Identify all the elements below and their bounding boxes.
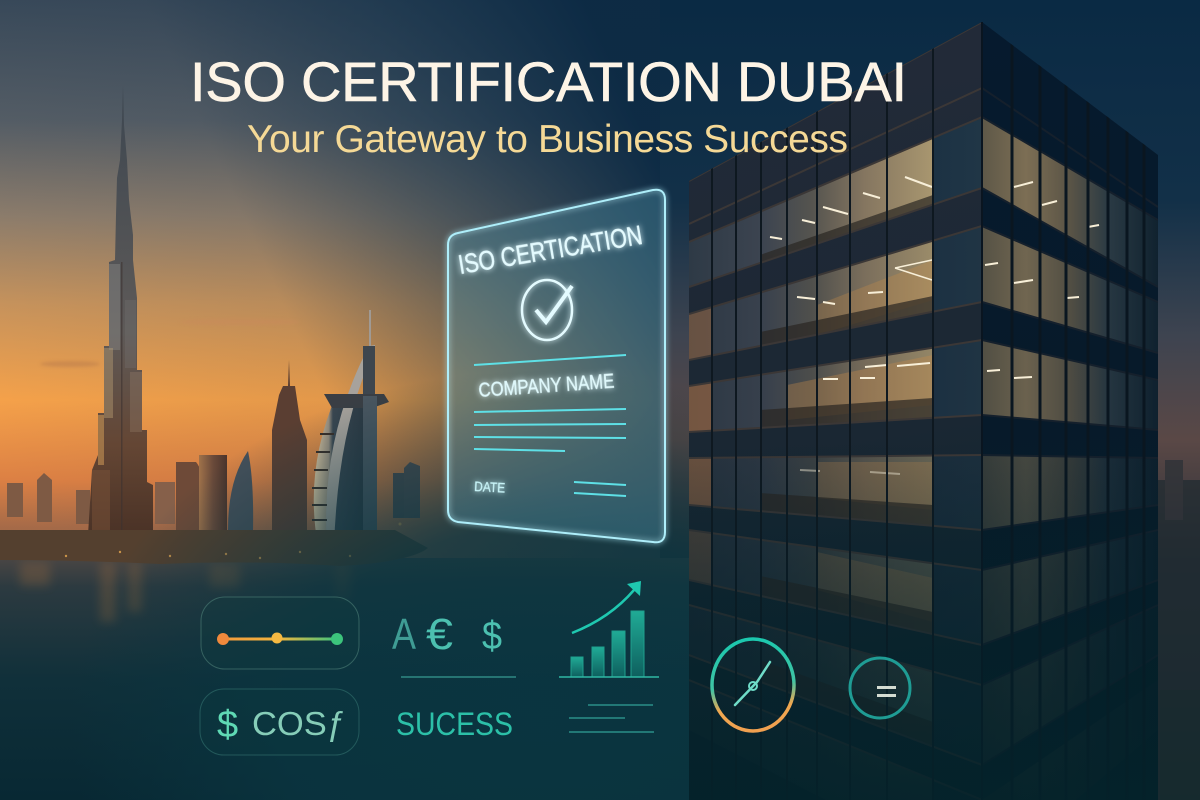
growth chart <box>559 581 659 677</box>
icon: clock gauge <box>712 639 794 731</box>
currency symbols <box>392 610 502 659</box>
icon: equals circle <box>850 658 910 718</box>
water <box>0 558 700 800</box>
office silhouettes <box>762 195 932 633</box>
teal haze behind icons <box>70 370 1010 800</box>
progress timeline box <box>201 597 359 669</box>
company name: COMPANY NAME <box>478 371 615 402</box>
cost box: $ <box>217 704 238 746</box>
date label: DATE <box>474 478 506 496</box>
date lines <box>574 482 626 496</box>
chart text lines <box>569 705 654 732</box>
subtitle: Your Gateway to Business Success <box>247 118 848 161</box>
cost box <box>200 689 359 755</box>
tower right face <box>983 23 1158 692</box>
cost box: COSƒ <box>252 705 346 742</box>
tower left face <box>689 0 982 800</box>
small distant buildings <box>7 462 420 524</box>
card divider <box>474 355 626 365</box>
currency divider <box>401 676 516 678</box>
lit left edge panes <box>689 307 712 585</box>
amber glow in lit floors <box>787 260 933 622</box>
icon: check mark <box>522 280 572 340</box>
burj khalifa tower <box>88 85 153 535</box>
burj al arab <box>312 310 389 547</box>
burj highlights <box>92 262 142 532</box>
card glass panel <box>448 190 665 542</box>
currency symbols: € <box>426 610 453 659</box>
water reflections <box>20 562 351 622</box>
shoreline lights <box>65 522 402 559</box>
icon: growth arrow <box>572 581 641 633</box>
success label: SUCESS <box>396 706 513 742</box>
currency symbols: $ <box>482 614 502 658</box>
distant city right of tower <box>1158 460 1200 800</box>
shoreline island <box>0 530 428 566</box>
card heading: ISO CERTICATION <box>456 220 644 280</box>
mid rise buildings <box>176 360 307 535</box>
dubai skyline <box>0 85 428 566</box>
card text lines <box>474 409 626 451</box>
office tower <box>689 0 1158 800</box>
certificate card <box>448 190 665 542</box>
title: ISO CERTIFICATION DUBAI <box>190 50 907 113</box>
currency symbols: A <box>392 610 417 659</box>
